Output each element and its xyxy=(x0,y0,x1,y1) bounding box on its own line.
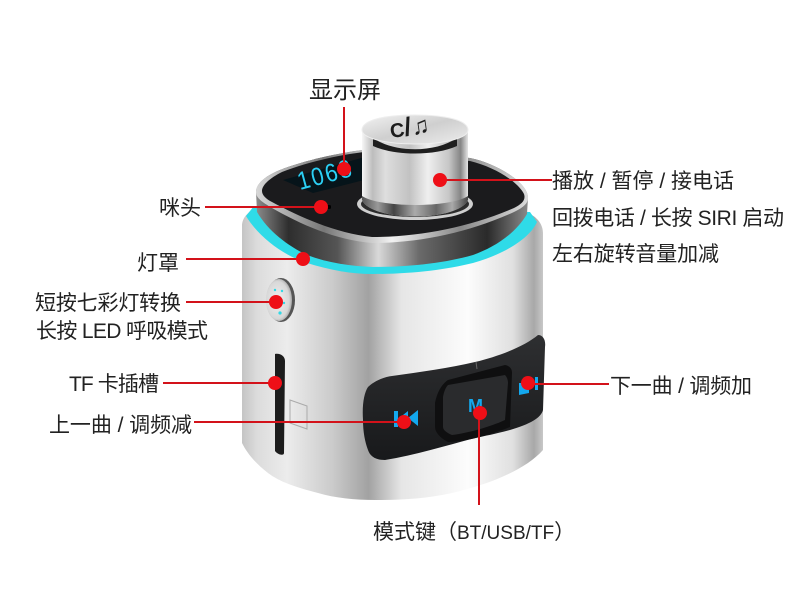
light ring xyxy=(246,206,537,274)
LED button xyxy=(266,278,295,322)
M label: M xyxy=(468,396,483,416)
label: LED button: 短按七彩灯转换 xyxy=(35,292,181,315)
label: display: 显示屏 xyxy=(309,77,381,104)
mode button xyxy=(435,365,512,442)
display screen xyxy=(283,155,372,196)
label: LED button xyxy=(35,292,208,343)
next icon xyxy=(519,377,538,395)
previous icon xyxy=(394,410,418,427)
label: knob functions: 播放 / 暂停 / 接电话 xyxy=(552,170,734,193)
microphone hole xyxy=(324,205,331,209)
panel rim xyxy=(256,150,528,243)
device illustration xyxy=(242,109,545,500)
label: lamp cover: 灯罩 xyxy=(137,252,179,275)
display digits: 1068 xyxy=(294,155,357,196)
label: LED button: 长按 LED 呼吸模式 xyxy=(36,320,208,343)
label: previous track: 上一曲 / 调频减 xyxy=(49,414,192,437)
top panel xyxy=(262,152,525,237)
label: knob functions: 回拨电话 / 长按 SIRI 启动 xyxy=(552,207,784,230)
control pad xyxy=(363,335,545,460)
label: microphone: 咪头 xyxy=(159,197,201,220)
TF card slot xyxy=(275,354,285,455)
callout lines and dots xyxy=(163,107,609,505)
label: mode key: 模式键（BT/USB/TF） xyxy=(373,521,575,544)
label: TF slot: TF 卡插槽 xyxy=(69,373,159,396)
label: next track: 下一曲 / 调频加 xyxy=(610,375,752,398)
knob label: C/♫ xyxy=(388,109,431,144)
knob base bands xyxy=(362,196,468,216)
TF card icon xyxy=(290,400,307,429)
metal collar xyxy=(256,150,528,267)
label: knob functions: 左右旋转音量加减 xyxy=(552,243,719,266)
label: knob functions xyxy=(552,170,784,266)
device body xyxy=(242,209,543,500)
knob xyxy=(357,109,473,220)
